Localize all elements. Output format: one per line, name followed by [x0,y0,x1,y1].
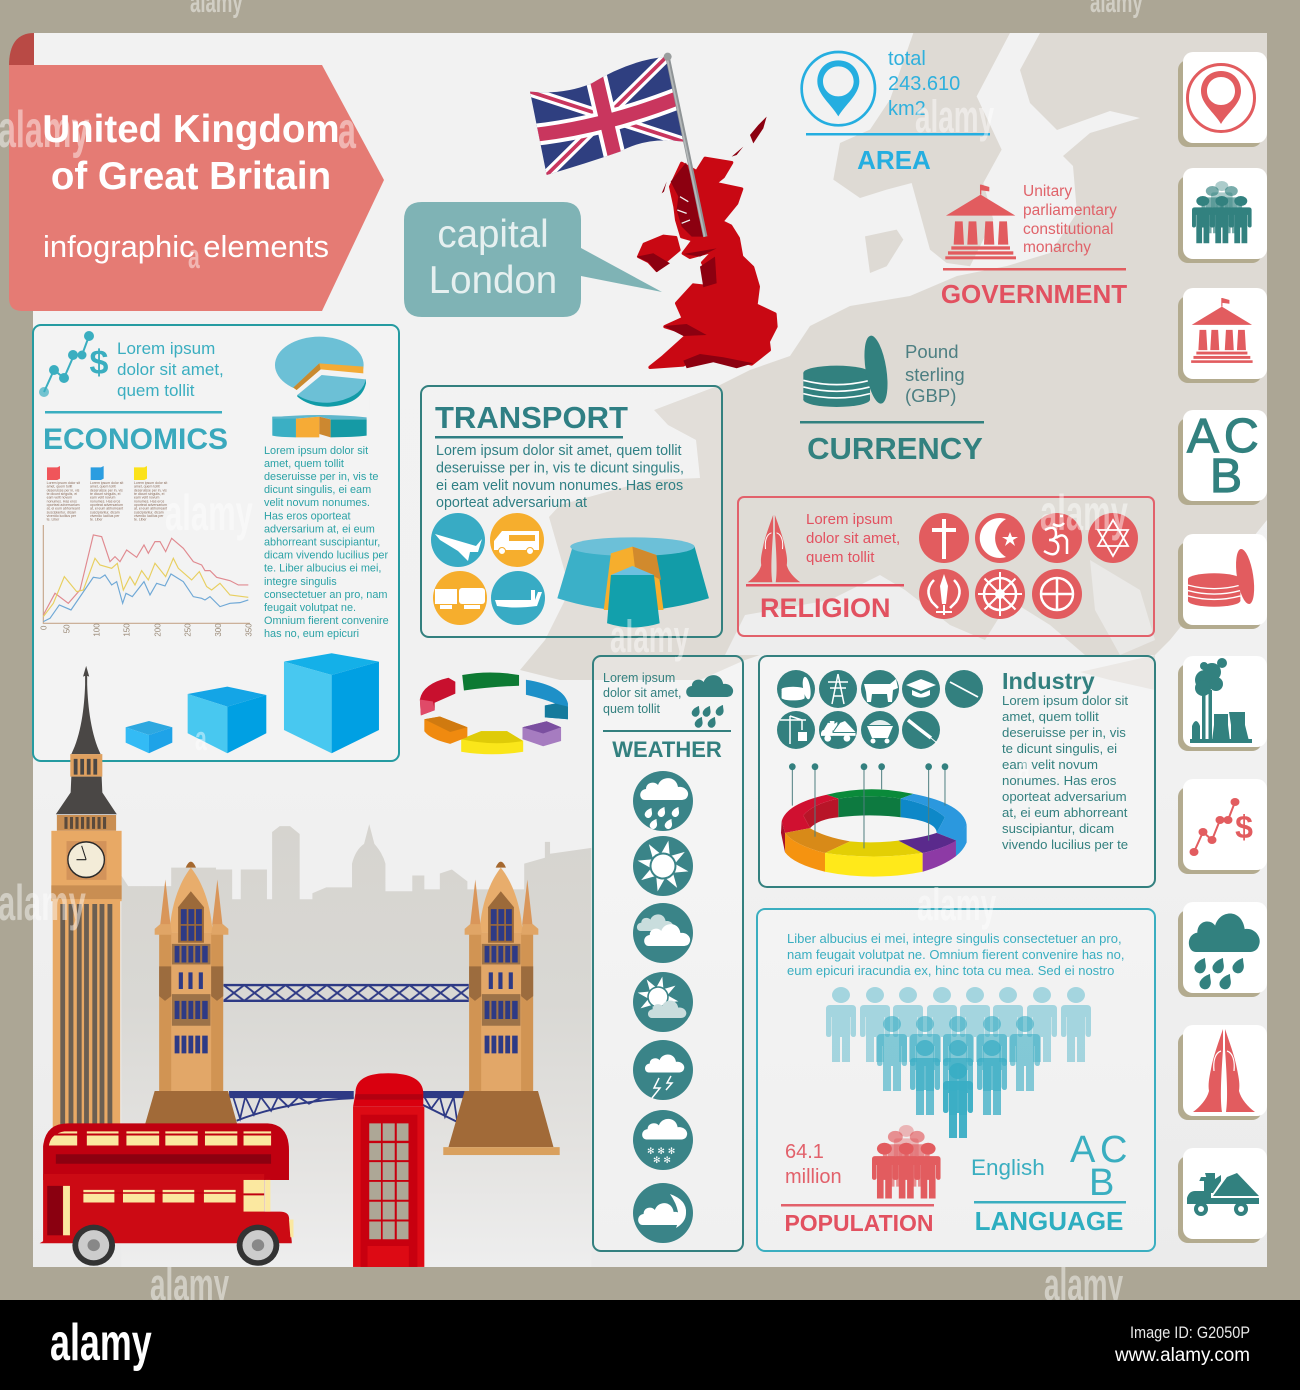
icon: rain [633,771,693,831]
stock watermarks: a [1018,749,1030,787]
government text: Unitary [1023,183,1072,200]
stock watermarks: alamy [917,879,996,930]
footer website: www.alamy.com [1114,1345,1250,1366]
icon: dharma wheel [975,569,1025,619]
icon tile: coins [1178,534,1267,629]
economics paragraph: consectetuer an pro, nam [264,589,388,601]
icon: snow cloud: ✻ ✻ ✻ [647,1147,675,1157]
bar chart: three cubes [126,653,379,753]
chart legend: nonumes. Has eros [47,499,77,503]
chart legend: at, ei eum abhorreant [134,507,167,511]
economics heading: ECONOMICS [43,423,228,456]
weather heading: WEATHER [612,737,722,762]
population heading: POPULATION [784,1210,934,1236]
chart legend: deseruisse per in, vis [134,488,167,492]
weather text: quem tollit [603,702,660,716]
chart legend: oporteat adversarium [90,503,123,507]
icon tile: language: C [1224,410,1259,463]
government heading: GOVERNMENT [941,279,1127,309]
line chart [39,525,254,637]
icon: sun [632,835,694,897]
industry paragraph: nonumes. Has eros [1002,773,1117,788]
industry icons [777,670,983,749]
illustration: red telephone box [353,1073,424,1267]
icon tile: language [1178,410,1267,505]
chart legend: te. Liber [134,518,147,522]
industry paragraph: deseruisse per in, vis [1002,725,1126,740]
stock watermarks: alamy [165,484,253,541]
industry paragraph: Lorem ipsum dolor sit [1002,693,1128,708]
line chart: 50 [62,624,71,633]
economics paragraph: dicunt singulis, ei eam [264,484,371,496]
callout: capital London [404,202,662,317]
chart legend: oporteat adversarium [134,503,167,507]
chart legend: deseruisse per in, vis [90,488,123,492]
icon: crescent and star [975,513,1025,563]
stock watermarks: alamy [915,91,994,142]
panel: area [802,48,990,175]
chart legend: at, ei eum abhorreant [47,507,80,511]
drum chart [272,415,367,437]
icon: growth chart and dollar: $ [90,344,109,382]
area value: total [888,48,926,70]
icon tile: truck [1178,1148,1267,1243]
chart legend: vivendo lucilius per [134,514,164,518]
icon tile: religion [1178,1025,1267,1120]
chart legend: te dicunt singulis, ei [90,492,121,496]
stock watermarks: alamy [150,1259,229,1310]
economics paragraph: Omnium fierent convenire [264,615,389,627]
line chart: 100 [92,623,101,637]
government text: monarchy [1023,239,1091,256]
icon: train [433,571,487,625]
chart legend: nonumes. Has eros [134,499,164,503]
government text: parliamentary [1023,202,1117,219]
panel: religion [738,497,1154,636]
icon: clouds [633,903,693,963]
chart legend: eam velit novum [90,496,115,500]
currency text: Pound [905,341,958,362]
skyline of London [121,824,591,1267]
economics paragraph: Lorem ipsum dolor sit [264,445,368,457]
icon: population crowd [872,1125,941,1198]
transport paragraph: ei eam velit novum nonumes. Has eros [436,478,683,494]
population paragraph: Liber albucius ei mei, integre singulis consectetuer an pro, [787,931,1122,946]
religion text: Lorem ipsum [806,511,893,528]
chart: exploded ring segments [420,672,568,754]
icon: thunder cloud [633,1040,693,1100]
panel: population and language [757,909,1155,1251]
economics paragraph: te. Liber albucius ei mei, [264,562,381,574]
area heading: AREA [857,145,931,175]
industry paragraph: eam velit novum [1002,757,1098,772]
flag of the United Kingdom on pole [527,53,705,237]
line chart: 200 [153,623,162,637]
chart legend: amet, quem tollit [47,485,72,489]
industry paragraph: at, ei eum abhorreant [1002,805,1128,820]
transport paragraph: deseruisse per in, vis te dicunt singulis, [436,460,684,476]
chart legend: Lorem ipsum dolor sit [47,481,80,485]
icon: khanda [919,569,969,619]
callout: capital London: London [429,259,557,302]
economics paragraph: deseruisse per in, vis te [264,471,378,483]
people pictogram [826,987,1091,1138]
chart legend: te dicunt singulis, ei [47,492,77,496]
economics intro text: Lorem ipsum [117,339,215,358]
currency heading: CURRENCY [807,431,983,466]
title heading: of Great Britain [51,155,331,198]
language letters: A [1070,1129,1096,1171]
weather text: dolor sit amet, [603,686,682,700]
drum chart with cut-out [557,537,709,627]
icon tile: power station [1178,656,1267,751]
chart legend: suscipiantur, dicam [134,510,164,514]
chart legend: Lorem ipsum dolor sit [134,481,167,485]
icon: circle cross [1032,569,1082,619]
icon: snow cloud [633,1110,693,1170]
currency text: sterling [905,364,965,385]
religion heading: RELIGION [760,593,891,623]
area value: km2 [888,98,926,120]
chart legend: vivendo lucilius per [47,514,77,518]
icon tile: language: A [1187,410,1219,463]
chart legend: te. Liber [47,518,60,522]
chart legend: amet, quem tollit [134,485,160,489]
economics paragraph: Has eros oporteat [264,510,351,522]
panel: currency [800,334,984,466]
icon: cross [919,513,969,563]
line chart: 250 [183,623,192,637]
area value: 243.610 [888,73,960,95]
icon tile: government [1178,288,1267,383]
icon tile: language: B [1210,450,1242,503]
economics paragraph: has no, eum epicuri [264,628,359,640]
currency text: (GBP) [905,385,956,406]
industry paragraph: suscipiantur, dicam [1002,821,1114,836]
subtitle: infographic elements [43,229,329,264]
industry heading: Industry [1002,668,1095,694]
stock watermarks: alamy [610,611,689,662]
chart legend: at, ei eum abhorreant [90,507,123,511]
illustration: double-decker bus [40,1123,293,1266]
illustration: Big Ben [51,666,122,1133]
icon: om [1032,513,1082,563]
icon: parliament building [945,185,1016,259]
economics paragraph: feugait volutpat ne. [264,602,356,614]
stock watermarks: a [338,102,357,160]
government text: constitutional [1023,221,1113,238]
footer image id: Image ID: G2050P [1130,1324,1250,1342]
icon: ship [491,571,545,625]
chart legend: eam velit novum [134,496,159,500]
transport paragraph: oporteat adversarium at [436,495,587,511]
chart legend: eam velit novum [47,496,72,500]
chart legend: oporteat adversarium [47,503,80,507]
title ribbon [9,33,384,311]
weather text: Lorem ipsum [603,671,675,685]
illustration: Tower Bridge [133,862,560,1155]
pie chart [275,337,370,410]
chart legend: te. Liber [90,518,103,522]
line chart: 0 [39,625,48,630]
chart legend: vivendo lucilius per [90,514,120,518]
panel: economics [33,325,399,761]
chart legend [47,466,167,522]
icon: praying hands [748,515,800,582]
panel: government [941,183,1127,309]
panel: weather [593,656,743,1251]
stock watermarks: alamy [0,874,86,931]
economics intro text: quem tollit [117,381,195,400]
chart legend: Lorem ipsum dolor sit [90,481,123,485]
icon tile: location [1178,52,1267,147]
economics paragraph: abhorreant suscipiantur, [264,536,380,548]
footer bar [0,1300,1300,1390]
language letters: B [1089,1162,1114,1204]
icon tile: economy: $ [1235,809,1253,845]
icon: location pin [802,52,875,125]
stock watermarks: alamy [1040,484,1128,541]
chart legend: amet, quem tollit [90,485,116,489]
icon: growth chart and dollar [39,331,109,397]
icon: sun and cloud [633,972,693,1032]
population value: 64.1 [785,1141,824,1163]
icon: coins [803,334,892,407]
map of the United Kingdom [637,117,776,368]
industry paragraph: oporteat adversarium [1002,789,1127,804]
language value: English [971,1155,1045,1180]
population paragraph: eum epicuri iracundia ex, hinc tota cu mea. Sed ei nostro [787,963,1114,978]
icon tile: weather [1178,902,1267,997]
population value: million [785,1166,842,1188]
footer logo: alamy [50,1315,152,1372]
population paragraph: nam feugait volutpat ne. Omnium fierent convenire has no, [787,947,1124,962]
ring chart [781,763,967,877]
religion text: quem tollit [806,549,875,566]
chart legend: deseruisse per in, vis [47,488,80,492]
line chart: 150 [122,623,131,637]
stock watermarks: alamy [0,101,89,159]
industry paragraph: amet, quem tollit [1002,709,1099,724]
icon: star of David [1088,513,1138,563]
icon: snow cloud: ✻ ✻ [653,1156,671,1166]
chart legend: suscipiantur, dicam [47,510,76,514]
icon: cloud and moon [633,1183,693,1243]
icon: van [490,513,544,567]
industry paragraph: te dicunt singulis, ei [1002,741,1117,756]
icon: airplane [431,513,485,567]
callout: capital London: capital [437,213,549,256]
economics paragraph: integre singulis [264,576,337,588]
icon: rain cloud [686,675,733,728]
chart legend: suscipiantur, dicam [90,510,120,514]
panel: industry [759,656,1155,887]
transport paragraph: Lorem ipsum dolor sit amet, quem tollit [436,443,682,459]
economics paragraph: dicam vivendo lucilius per [264,550,388,562]
language letters: C [1100,1129,1127,1171]
icon tile: people [1178,168,1267,263]
religion text: dolor sit amet, [806,530,900,547]
economics intro text: dolor sit amet, [117,360,224,379]
language heading: LANGUAGE [975,1206,1123,1236]
industry paragraph: vivendo lucilius per te [1002,837,1128,852]
stock watermarks: a [188,237,200,275]
icon tile: economy [1178,779,1267,874]
chart legend: te dicunt singulis, ei [134,492,165,496]
chart legend: nonumes. Has eros [90,499,120,503]
economics paragraph: adversarium at, ei eum [264,524,375,536]
economics paragraph: velit novum nonumes. [264,497,370,509]
economics paragraph: amet, quem tollit [264,458,344,470]
stock watermarks: a [195,719,207,757]
line chart: 350 [245,623,254,637]
title heading: United Kingdom [42,108,340,151]
stock watermarks: alamy [1044,1259,1123,1310]
panel: transport [421,386,722,637]
transport heading: TRANSPORT [435,400,628,435]
background map of Europe [520,33,1267,690]
line chart: 300 [214,623,223,637]
